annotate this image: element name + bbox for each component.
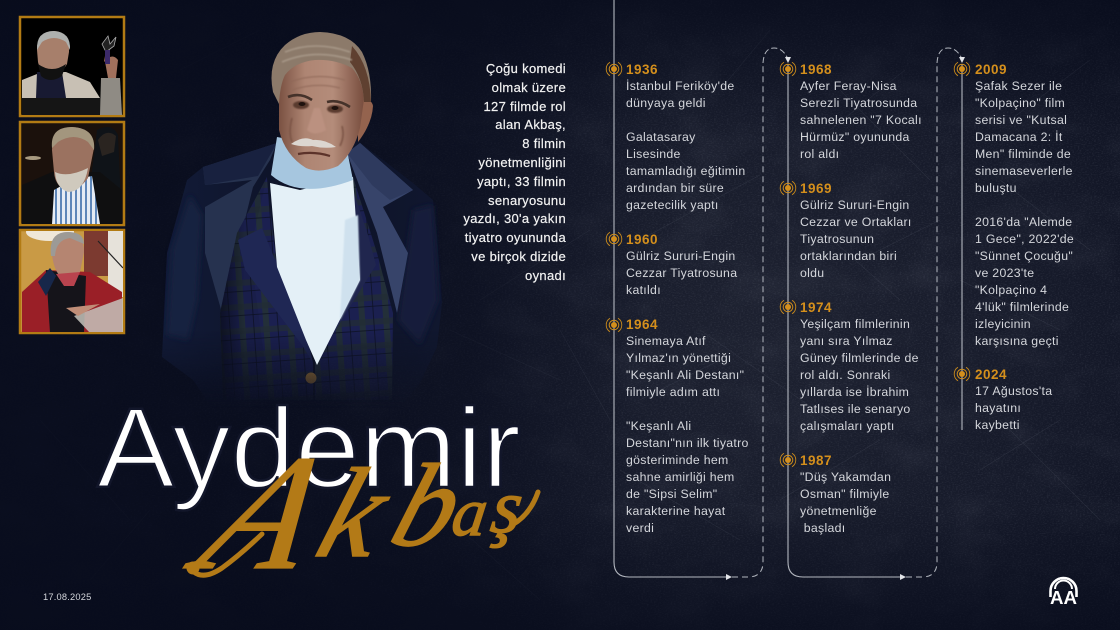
plaid jacket bbox=[220, 177, 313, 400]
turtleneck bbox=[271, 137, 353, 189]
event 1936: İstanbul Feriköy'de dünyaya geldi Galatasaray Lisesinde tamamladığı eğitimin ardından bir süre gazetecilik yaptı bbox=[626, 79, 745, 212]
column 3 line bbox=[961, 64, 963, 430]
surname signature: k bbox=[303, 443, 408, 584]
coat bbox=[162, 140, 442, 378]
coat right collar and lapel bbox=[347, 143, 413, 313]
coat left collar and lapel bbox=[203, 143, 277, 313]
event 1968: Ayfer Feray-Nisa Serezli Tiyatrosunda sahnelenen "7 Kocalı Hürmüz" oyununda rol aldı bbox=[800, 79, 922, 161]
event 2009: Şafak Sezer ile "Kolpaçino" film serisi ve "Kutsal Damacana 2: İt Men" filminde de sinemaseverlerle buluştu 2016'da "Alemde 1 Gece", 2022'de "Sünnet Çocuğu" ve 2023'te "Kolpaçino 4 4'lük" filmlerinde izleyicinin karşısına geçti bbox=[975, 79, 1074, 348]
event 2009: 2009 bbox=[975, 62, 1007, 77]
event 1974: 1974 bbox=[800, 300, 832, 315]
event 1968: 1968 bbox=[800, 62, 832, 77]
column 2 line bbox=[788, 64, 902, 577]
photo 2: with white beard and striped shirt bbox=[20, 122, 124, 225]
event 1964: 1964 bbox=[626, 317, 658, 332]
event 2024: 2024 bbox=[975, 367, 1007, 382]
surname signature: A bbox=[166, 421, 362, 604]
date: 17.08.2025 bbox=[43, 592, 92, 602]
event 1987: 1987 bbox=[800, 453, 832, 468]
event 1974: Yeşilçam filmlerinin yanı sıra Yılmaz Güney filmlerinde de rol aldı. Sonraki yıllarda ise İbrahim Tatlıses ile senaryo çalışmaları yaptı bbox=[800, 317, 919, 433]
face bbox=[272, 32, 373, 171]
portrait: main photo of Aydemir Akbaş bbox=[162, 32, 442, 394]
photo strip bbox=[18, 16, 126, 334]
hair bbox=[272, 32, 371, 104]
timeline markers bbox=[606, 62, 970, 467]
surname signature: ş bbox=[487, 464, 528, 549]
surname signature: b bbox=[377, 441, 479, 571]
surname signature bbox=[166, 421, 538, 604]
surname signature: a bbox=[448, 474, 493, 550]
event 2024: 17 Ağustos'ta hayatını kaybetti bbox=[975, 384, 1052, 432]
brows and eyes bbox=[288, 95, 350, 107]
first name: Aydemir bbox=[97, 385, 521, 511]
logo: AA: AA bbox=[1050, 588, 1077, 608]
event 1964: Sinemaya Atıf Yılmaz'ın yönettiği "Keşanlı Ali Destanı" filmiyle adım attı "Keşanlı Ali Destanı"nın ilk tiyatro gösteriminde hem sahne amirliği hem de "Sipsi Selim" karakterine hayat verdi bbox=[626, 334, 749, 535]
column 1 line bbox=[614, 0, 728, 577]
event 1987: "Düş Yakamdan Osman" filmiyle yönetmenliğe başladı bbox=[800, 470, 891, 535]
button bbox=[306, 372, 316, 384]
event 1936: 1936 bbox=[626, 62, 658, 77]
event 1969: 1969 bbox=[800, 181, 832, 196]
intro text: Çoğu komedi olmak üzere 127 filmde rol alan Akbaş, 8 filmin yönetmenliğini yaptı, 33 filmin senaryosunu yazdı, 30'a yakın tiyatro oyununda ve birçok dizide oynadı bbox=[463, 61, 566, 283]
event 1960: Gülriz Sururi-Engin Cezzar Tiyatrosuna katıldı bbox=[626, 249, 737, 297]
white shirt bbox=[270, 177, 360, 365]
photo 1: holding an award at the podium bbox=[20, 17, 124, 116]
photo 3: speaking at a lectern in a red jacket bbox=[20, 223, 124, 333]
event 1960: 1960 bbox=[626, 232, 658, 247]
event 1969: Gülriz Sururi-Engin Cezzar ve Ortakları Tiyatrosunun ortaklarından biri oldu bbox=[800, 198, 912, 280]
arrowheads bbox=[726, 57, 965, 580]
moustache bbox=[291, 138, 336, 148]
